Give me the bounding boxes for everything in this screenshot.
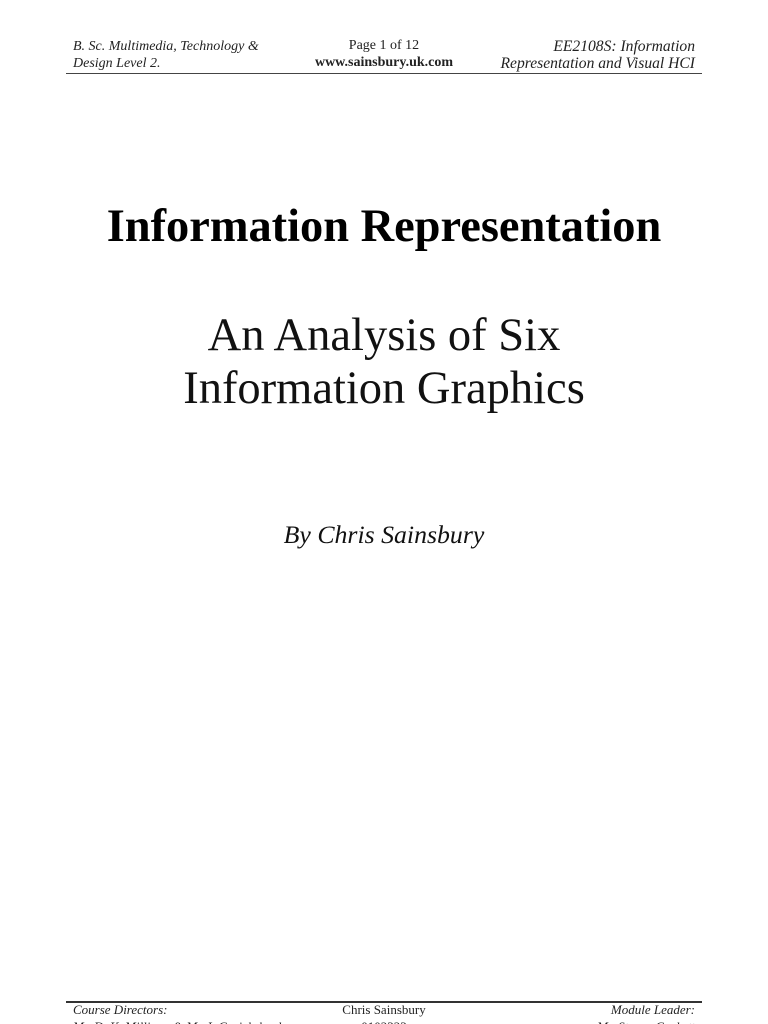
footer left text: Course Directors: [73,1002,168,1016]
footer centre text: Chris Sainsbury [342,1002,426,1016]
footer left text [73,1002,284,1024]
header rule [66,72,702,74]
header [66,38,702,74]
header centre page number and website [315,38,453,70]
footer [66,1001,702,1024]
header right text: Representation and Visual HCI [501,54,695,72]
author: By Chris Sainsbury [284,520,484,549]
header right text [500,38,696,72]
title: Information Representation [107,201,661,252]
subtitle: Information Graphics [183,363,585,414]
footer right text [597,1002,695,1024]
subtitle [183,310,585,414]
footer right text: Module Leader: [611,1002,695,1016]
header left text: Design Level 2. [73,56,160,70]
header left text: B. Sc. Multimedia, Technology & [73,38,259,54]
footer centre text [342,1002,426,1024]
footer rule [66,1001,702,1002]
header right text: EE2108S: Information [553,38,695,54]
header left text [72,38,259,70]
header centre page number and website: Page 1 of 12 [349,38,419,53]
header centre page number and website: www.sainsbury.uk.com [315,55,453,70]
subtitle: An Analysis of Six [208,310,560,361]
